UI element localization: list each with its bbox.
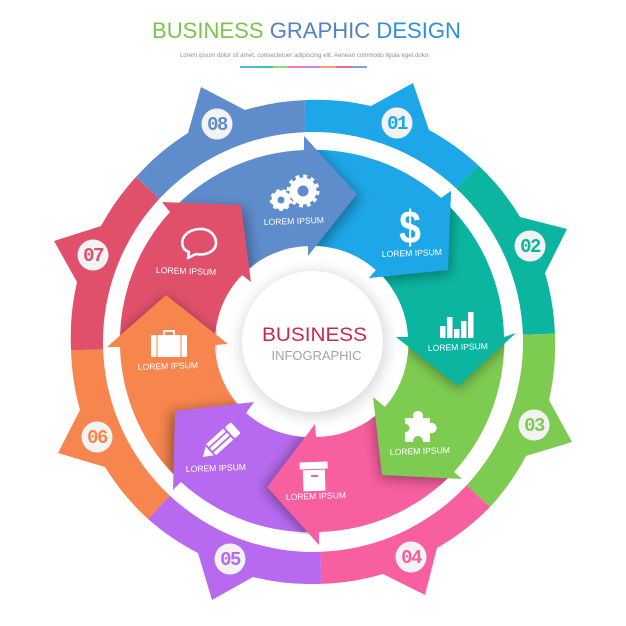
title underline [240, 66, 367, 68]
outer segment 03: 03 [524, 415, 545, 437]
arrow 06 [107, 295, 246, 482]
title: BUSINESS GRAPHIC DESIGN [152, 18, 461, 43]
arrow 02 [376, 198, 516, 386]
outer segment 04 [320, 485, 490, 595]
arrow 05 [173, 402, 319, 532]
arrow 03 [373, 337, 504, 479]
subtitle: Lorem ipsum dolor sit amet, consectetuer adipiscing elit. Aenean commodo ligula eget dolor. [180, 53, 430, 59]
arrow 04 [267, 407, 454, 545]
icon: speech bubble [182, 229, 216, 258]
icon: bar chart [440, 312, 474, 338]
outer segment 03 [467, 334, 572, 507]
outer segment 07: 07 [83, 245, 104, 267]
label 02: LOREM IPSUM [428, 341, 488, 353]
outer segment 07 [54, 177, 159, 350]
icon: gears [272, 176, 318, 210]
label 08: LOREM IPSUM [264, 215, 324, 227]
inner arrow wheel [107, 136, 516, 546]
outer segment 06 [58, 349, 170, 519]
center circle [242, 271, 383, 412]
outer segment 02 [456, 165, 567, 335]
outer segment 05 [148, 496, 321, 600]
icon: pencil [198, 422, 241, 463]
icon: briefcase [151, 331, 187, 357]
label 06: LOREM IPSUM [138, 360, 198, 372]
arrow 08 [170, 136, 357, 275]
label 04: LOREM IPSUM [286, 490, 346, 502]
icon: box [300, 462, 329, 491]
outer segment 06: 06 [87, 427, 108, 449]
infographic canvas [54, 22, 572, 600]
outer segment 08 [136, 87, 306, 199]
outer segment 01 [305, 83, 478, 188]
outer segment 02: 02 [520, 236, 541, 258]
outer ring [54, 83, 572, 600]
outer segment 01: 01 [387, 113, 408, 135]
arrow 07 [120, 202, 251, 347]
outer segment 05: 05 [220, 549, 241, 571]
center heading: BUSINESS [262, 325, 367, 346]
label 05: LOREM IPSUM [186, 462, 246, 474]
outer segment 08: 08 [207, 114, 228, 136]
label 01: LOREM IPSUM [382, 247, 442, 259]
label 03: LOREM IPSUM [390, 445, 450, 457]
outer segment 04: 04 [401, 547, 422, 569]
center subheading: INFOGRAPHIC [272, 348, 362, 363]
arrow 01 [361, 176, 451, 278]
icon: dollar sign: $ [399, 202, 421, 254]
icon: puzzle piece [402, 411, 437, 446]
label 07: LOREM IPSUM [156, 265, 216, 277]
